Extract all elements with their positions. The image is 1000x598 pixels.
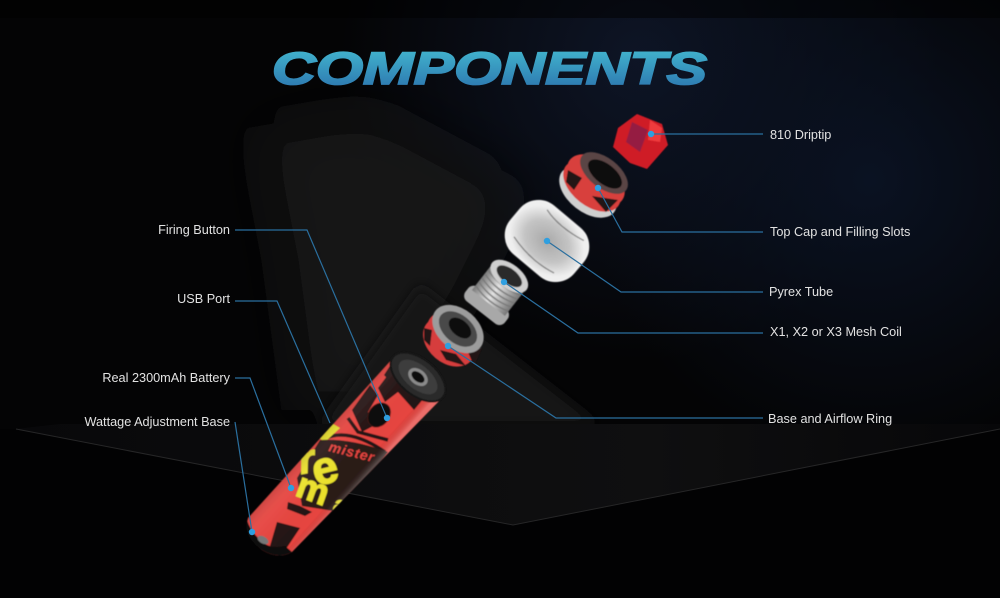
tube body: [246, 360, 440, 556]
label: mesh coil: X1, X2 or X3 Mesh Coil: [770, 325, 902, 339]
label: base ring: Base and Airflow Ring: [768, 412, 892, 426]
dark lettering panel: [297, 440, 388, 512]
top cap: [382, 343, 454, 411]
label: 810 driptip: 810 Driptip: [770, 128, 831, 142]
leader: 810 driptip: [648, 131, 763, 137]
mesh coil: [461, 251, 536, 328]
title: COMPONENTS: [272, 43, 707, 94]
base and airflow ring: [413, 295, 493, 377]
leader: mesh coil: [501, 279, 763, 333]
tube body: mister: [327, 438, 377, 465]
leader: firing button: [235, 230, 390, 421]
firing button: [363, 399, 395, 431]
yellow lettering: r: [295, 436, 320, 483]
top cap and filling slots: [550, 144, 635, 228]
label: battery: Real 2300mAh Battery: [102, 371, 231, 385]
pyrex tube: [496, 191, 598, 291]
leader: battery: [235, 378, 294, 491]
yellow lettering: [295, 448, 343, 510]
leader: wattage base: [235, 422, 255, 535]
label: firing button: Firing Button: [158, 223, 230, 237]
810 driptip: [613, 114, 668, 169]
leader: pyrex tube: [544, 238, 763, 292]
label: wattage base: Wattage Adjustment Base: [84, 415, 230, 429]
leader: base ring: [445, 343, 763, 418]
battery tube: [246, 354, 444, 556]
yellow lettering: e: [306, 439, 343, 496]
label: pyrex tube: Pyrex Tube: [769, 285, 833, 299]
yellow lettering: a: [330, 491, 352, 521]
leader: top cap: [595, 185, 763, 232]
leader: usb port: [235, 301, 330, 423]
lower scribbles: [287, 502, 312, 516]
label: usb port: USB Port: [177, 292, 230, 306]
yellow lettering: m: [291, 464, 335, 513]
bottom end: [246, 520, 292, 556]
label: top cap: Top Cap and Filling Slots: [770, 225, 910, 239]
